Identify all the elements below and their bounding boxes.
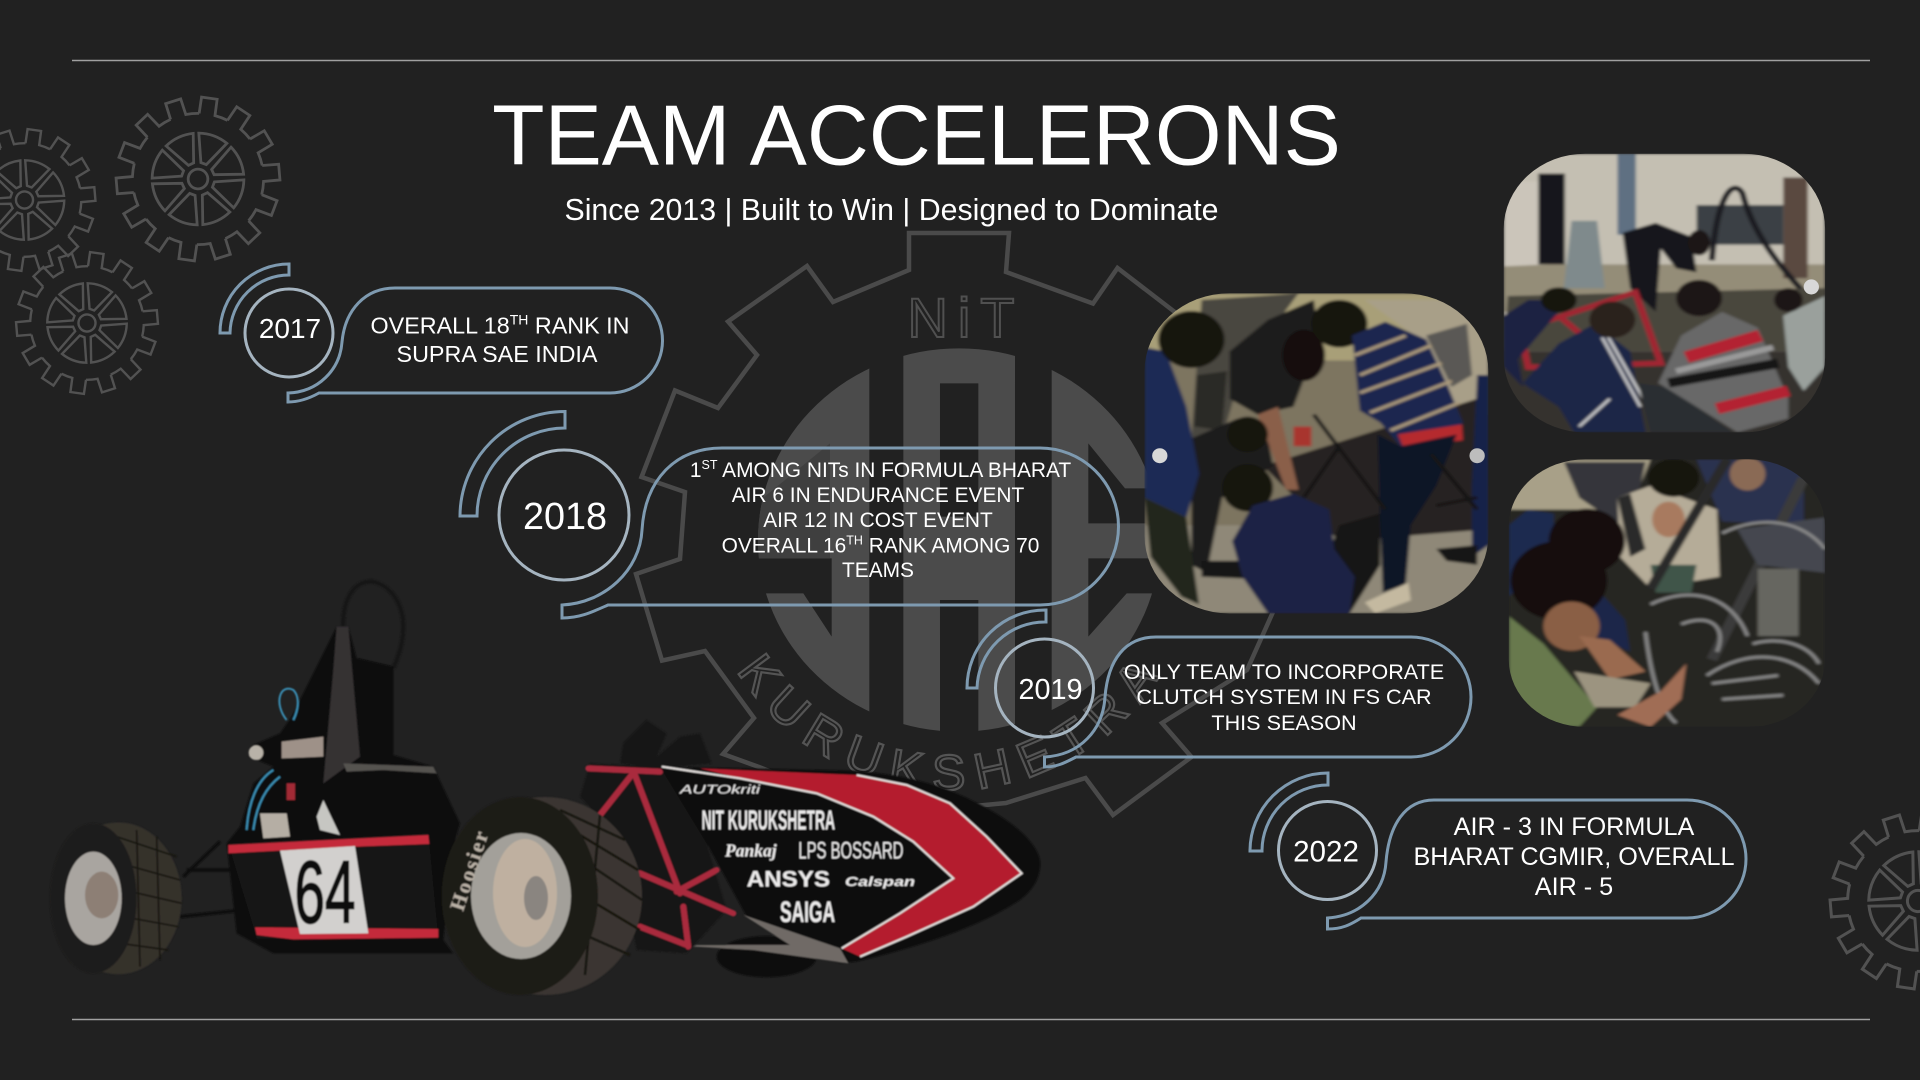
callout 2019 bbox=[1044, 637, 1471, 767]
title: TEAM ACCELERONS bbox=[492, 87, 1341, 183]
photo carousel arrow bbox=[1804, 279, 1819, 294]
text 2018: ST bbox=[702, 458, 718, 472]
car sponsor: Autokriti: AUTOkriti bbox=[678, 782, 761, 796]
car side panel bbox=[228, 833, 438, 938]
car rear wheel bbox=[50, 822, 182, 974]
subtitle: Since 2013 | Built to Win | Designed to Dominate bbox=[564, 194, 1219, 227]
car rear body bbox=[227, 627, 460, 953]
year 2022: 2022 bbox=[1293, 836, 1359, 868]
panel: 2018 milestone bbox=[460, 412, 1118, 618]
text 2022: AIR - 3 IN FORMULA bbox=[1454, 813, 1695, 841]
text 2018: OVERALL 16 bbox=[722, 534, 1039, 558]
year 2019: 2019 bbox=[1018, 674, 1083, 706]
car sponsor: Saiga: SAIGA bbox=[780, 896, 835, 929]
car cockpit frame backing bbox=[580, 763, 727, 953]
car roll hoop bbox=[343, 582, 403, 668]
car suspension bbox=[180, 842, 243, 917]
photo carousel arrows bbox=[1152, 448, 1485, 463]
car number: 64 bbox=[295, 842, 355, 942]
icon: gear top right of cluster bbox=[103, 85, 293, 273]
photo: team working, lower right bbox=[1509, 457, 1825, 727]
text 2018: TEAMS bbox=[842, 559, 914, 582]
year 2018: 2018 bbox=[523, 496, 607, 538]
logo text Kurukshetra: KURUKSHETRA bbox=[737, 652, 1161, 792]
year 2017: 2017 bbox=[259, 313, 321, 344]
car rear section bbox=[50, 582, 460, 974]
photo: team working, top right bbox=[1504, 154, 1825, 432]
car red frame bbox=[588, 768, 733, 947]
text 2018: 1 bbox=[690, 458, 1071, 482]
panel: 2022 milestone bbox=[1250, 773, 1746, 929]
text 2017: SUPRA SAE INDIA bbox=[397, 341, 598, 367]
text 2017: TH bbox=[510, 312, 528, 328]
wheel sidewall text: Hoosier bbox=[445, 826, 494, 914]
car front wheel bbox=[442, 797, 642, 995]
icon: gear left bbox=[0, 119, 107, 281]
car sponsor: Ansys: ANSYS bbox=[747, 867, 830, 892]
car nose bbox=[660, 767, 1040, 963]
panel: 2017 milestone bbox=[220, 264, 662, 402]
panel: 2019 milestone bbox=[967, 610, 1471, 767]
car nose red livery bbox=[700, 768, 1022, 957]
text 2018: RANK AMONG 70 bbox=[863, 534, 1039, 558]
car splitter bbox=[693, 915, 848, 963]
text 2019: ONLY TEAM TO INCORPORATE bbox=[1124, 659, 1444, 684]
text 2017: OVERALL 18 bbox=[371, 312, 629, 338]
arc ornament 2017 bbox=[220, 264, 289, 333]
text 2017: RANK IN bbox=[528, 312, 629, 338]
car sponsor: Pankaj: Pankaj bbox=[724, 841, 778, 861]
callout 2022 bbox=[1328, 800, 1746, 929]
text 2019: CLUTCH SYSTEM IN FS CAR bbox=[1136, 684, 1432, 709]
watermark: NIT SAE Kurukshetra logo bbox=[633, 230, 1275, 818]
arc ornament 2018 bbox=[460, 412, 565, 516]
car steering cluster bbox=[620, 720, 712, 768]
year circle 2022 bbox=[1278, 802, 1376, 900]
car front section bbox=[580, 720, 1040, 977]
bottom rule bbox=[72, 1018, 1870, 1020]
year circle 2017 bbox=[245, 289, 333, 377]
logo SAE letters bbox=[758, 348, 1152, 731]
car sponsor: LPS Bossard: LPS BOSSARD bbox=[798, 838, 903, 865]
top rule bbox=[72, 60, 1870, 62]
car sponsor: Calspan: Calspan bbox=[845, 874, 915, 889]
car far wheel bbox=[717, 936, 817, 977]
illustration: race car bbox=[50, 582, 1040, 995]
icon: gear bottom right corner bbox=[1816, 801, 1920, 1001]
arc ornament 2019 bbox=[967, 610, 1046, 688]
callout 2018 bbox=[562, 448, 1118, 618]
car nose white lines bbox=[662, 767, 1022, 957]
text 2018: AIR 12 IN COST EVENT bbox=[763, 509, 993, 532]
car sponsor: NIT Kurukshetra: NIT KURUKSHETRA bbox=[702, 804, 835, 835]
year circle 2018 bbox=[499, 450, 629, 580]
callout 2017 bbox=[288, 288, 662, 402]
text 2018: AIR 6 IN ENDURANCE EVENT bbox=[732, 484, 1024, 507]
logo gear outline bbox=[636, 233, 1273, 815]
car number plate bbox=[280, 846, 368, 934]
text 2022: AIR - 5 bbox=[1535, 873, 1613, 901]
icon: gear lower bbox=[5, 242, 169, 404]
text 2018: AMONG NITs IN FORMULA BHARAT bbox=[717, 459, 1071, 482]
text 2022: BHARAT CGMIR, OVERALL bbox=[1414, 843, 1734, 871]
text 2018: TH bbox=[846, 534, 863, 548]
year circle 2019 bbox=[996, 639, 1094, 737]
logo text NIT: NiT bbox=[908, 286, 1014, 349]
arc ornament 2022 bbox=[1250, 773, 1328, 851]
text 2019: THIS SEASON bbox=[1211, 710, 1357, 735]
photo: team working, centre bbox=[1144, 293, 1488, 613]
